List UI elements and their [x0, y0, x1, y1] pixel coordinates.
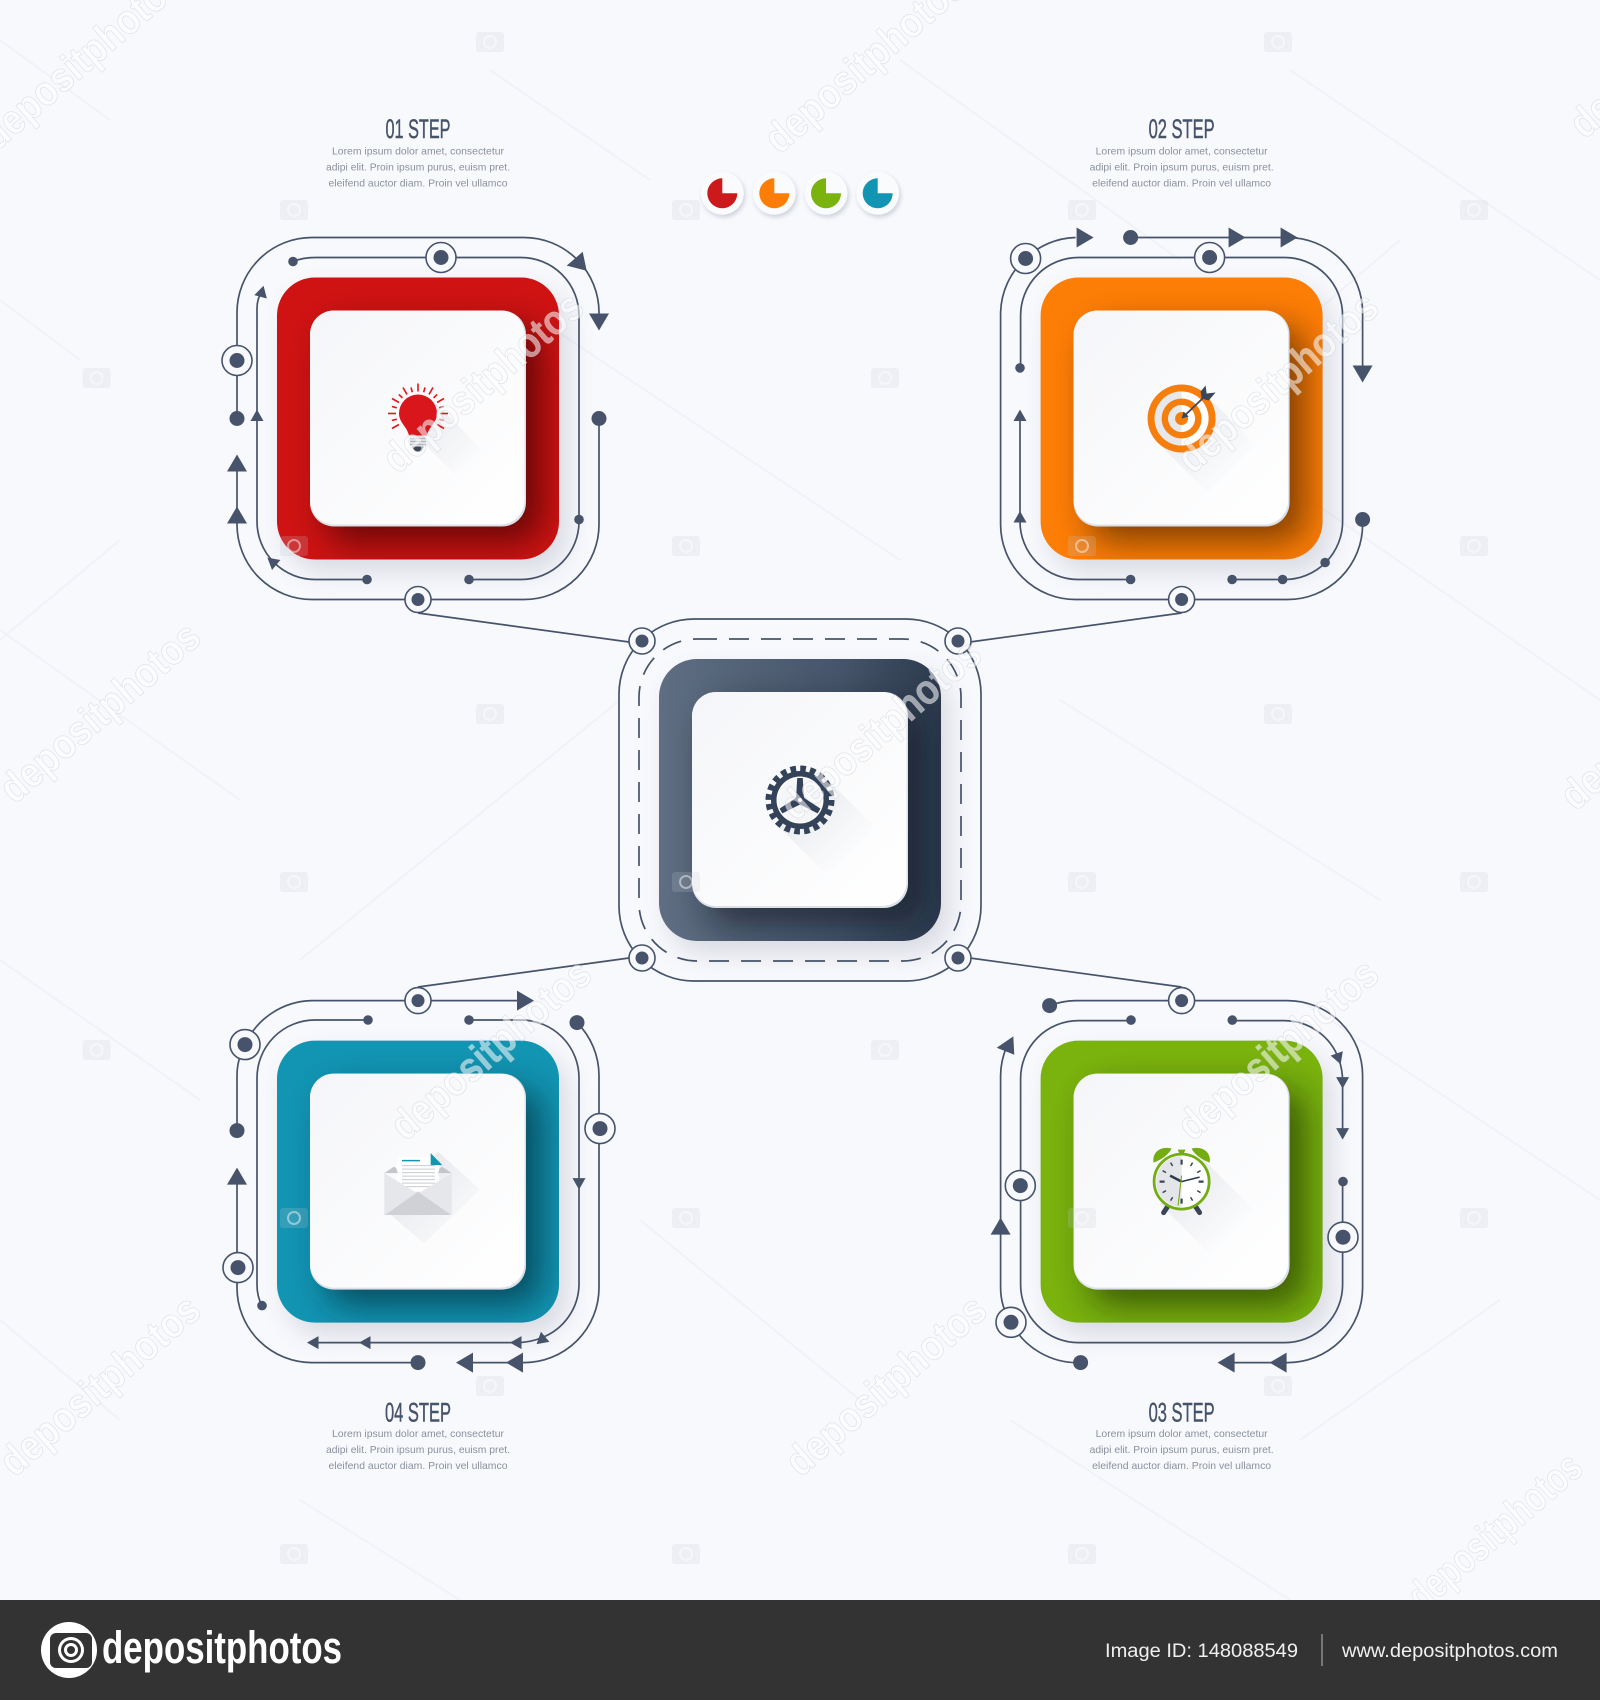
watermark overlay: depositphotos	[373, 282, 592, 482]
watermark overlay: depositphotos	[776, 1285, 995, 1485]
heading: 03 STEP: 03 STEP	[1149, 1398, 1215, 1428]
badge: orange	[753, 172, 797, 217]
watermark overlay: depositphotos	[1168, 949, 1387, 1149]
white card	[692, 692, 908, 908]
icon: alarm clock	[1153, 1148, 1254, 1254]
watermark overlay: depositphotos	[1168, 282, 1387, 482]
panel: step 03	[991, 988, 1363, 1472]
description text	[326, 146, 510, 190]
description text: Lorem ipsum dolor amet, consectetur	[1096, 146, 1268, 158]
circuit lines	[222, 238, 609, 612]
description text: Lorem ipsum dolor amet, consectetur	[332, 1428, 504, 1440]
icon: light bulb	[388, 384, 481, 474]
panel: step 01	[222, 114, 609, 612]
circuit lines	[1001, 228, 1373, 612]
white card	[1074, 310, 1290, 526]
icon: target with arrow	[1148, 384, 1256, 492]
white card	[310, 1074, 526, 1290]
description text	[1090, 1428, 1274, 1472]
description text: eleifend auctor diam. Proin vel ullamco	[328, 178, 508, 190]
colored square: orange	[1041, 278, 1332, 572]
white card	[310, 310, 526, 526]
description text: adipi elit. Proin ipsum purus, euism pret.	[326, 162, 510, 174]
circuit lines	[991, 988, 1363, 1373]
description text: adipi elit. Proin ipsum purus, euism pret.	[326, 1444, 510, 1456]
heading: 04 STEP: 04 STEP	[385, 1398, 451, 1428]
legend: four colored pie badges	[701, 172, 901, 217]
footer bar	[0, 1600, 1600, 1700]
heading: 02 STEP: 02 STEP	[1149, 114, 1215, 144]
watermark overlay: depositphotos	[381, 949, 600, 1149]
description text	[1090, 146, 1274, 190]
icon: camera logo	[41, 1622, 97, 1678]
badge: green	[804, 172, 849, 217]
description text: adipi elit. Proin ipsum purus, euism pret.	[1090, 162, 1274, 174]
icon: gear	[769, 769, 874, 874]
badge: teal	[856, 172, 901, 217]
colored square: red	[277, 278, 568, 572]
connector lines between center hub and steps	[418, 613, 1182, 987]
description text: Lorem ipsum dolor amet, consectetur	[1096, 1428, 1268, 1440]
panel: step 04	[223, 988, 615, 1472]
panel: center hub	[619, 619, 981, 981]
website url: www.depositphotos.com	[1341, 1641, 1558, 1662]
heading: 01 STEP: 01 STEP	[386, 114, 450, 144]
description text: eleifend auctor diam. Proin vel ullamco	[1092, 1460, 1271, 1472]
circuit lines	[223, 988, 615, 1373]
description text: eleifend auctor diam. Proin vel ullamco	[328, 1460, 508, 1472]
watermark overlay: depositphotos	[771, 629, 990, 829]
white card	[1074, 1074, 1290, 1290]
logo wordmark: depositphotos	[102, 1622, 342, 1673]
description text: adipi elit. Proin ipsum purus, euism pret.	[1090, 1444, 1274, 1456]
panel: step 02	[1001, 114, 1373, 612]
colored square: slate	[659, 659, 950, 954]
description text: Lorem ipsum dolor amet, consectetur	[332, 146, 504, 158]
center rings and nodes	[619, 619, 981, 981]
colored square: green	[1041, 1041, 1332, 1336]
description text	[326, 1428, 510, 1472]
icon: envelope with letter	[384, 1152, 480, 1244]
badge: red	[701, 172, 745, 217]
description text: eleifend auctor diam. Proin vel ullamco	[1092, 178, 1271, 190]
colored square: teal	[277, 1041, 568, 1336]
image id: Image ID: 148088549	[1105, 1641, 1298, 1662]
